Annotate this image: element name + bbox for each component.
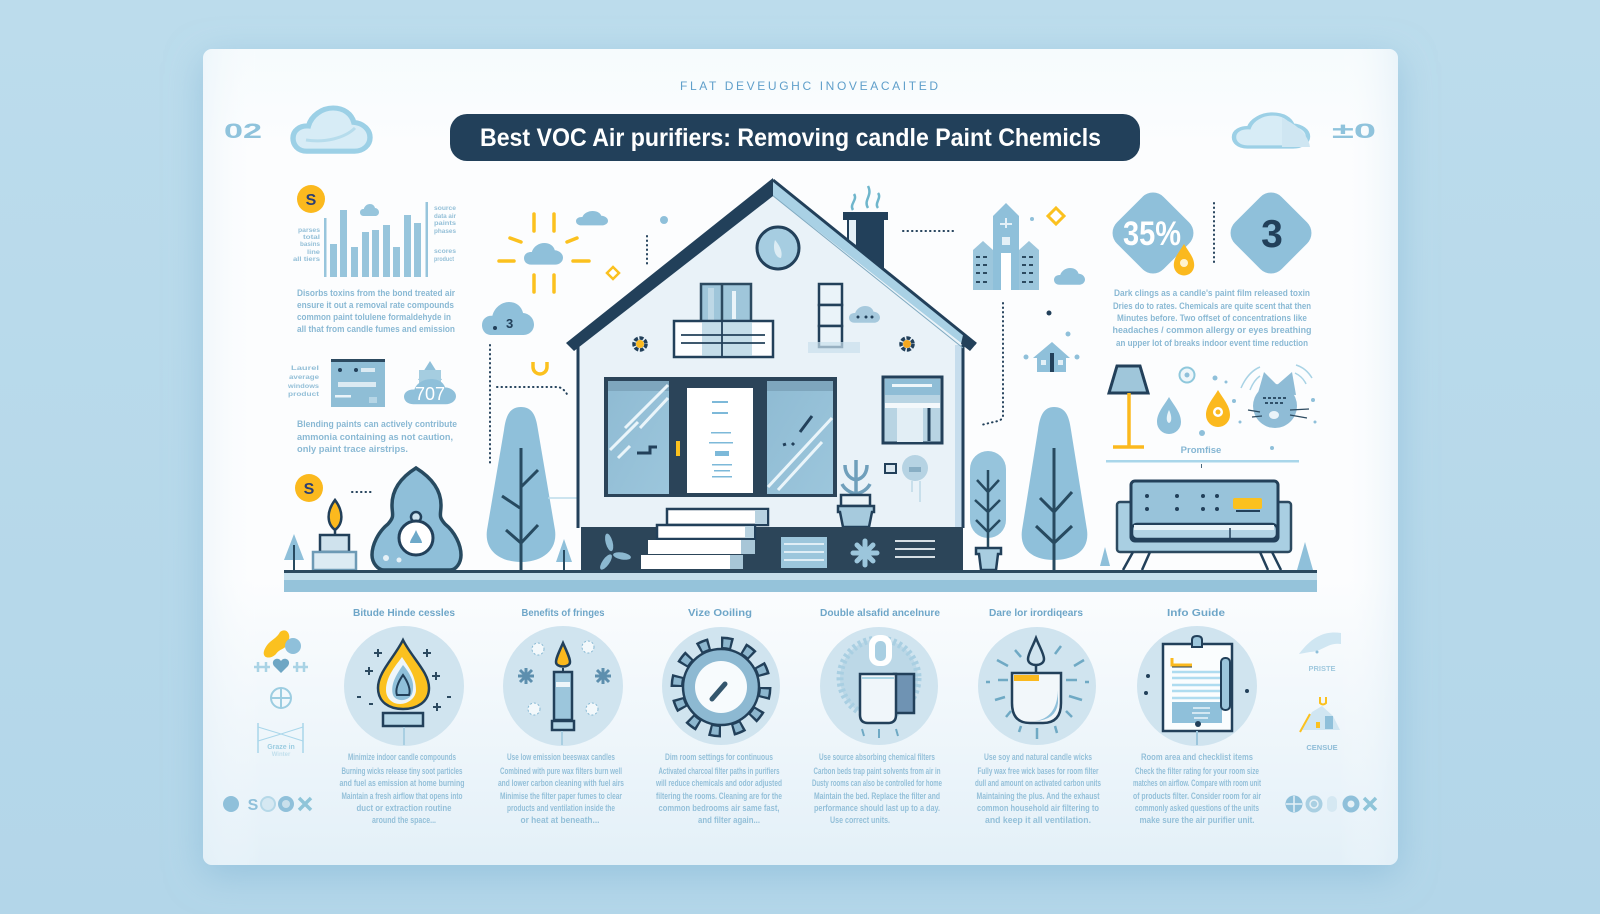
small house icon — [1024, 310, 1080, 372]
text block: dull and amount on activated carbon units — [975, 778, 1101, 788]
text block — [1133, 752, 1261, 825]
badge: dollar top — [297, 185, 325, 213]
title banner — [450, 114, 1140, 161]
icon: frame chart: Winter — [272, 752, 291, 758]
dotted connector: left — [490, 345, 568, 465]
text block — [655, 752, 782, 825]
step: clipboard — [1133, 608, 1261, 825]
potted plant — [838, 460, 874, 527]
circle icon — [978, 627, 1096, 745]
text block: stat notes: Minutes before. Two offset of concentrations like — [1117, 313, 1307, 324]
tall window — [819, 284, 842, 347]
flower right — [853, 541, 877, 565]
circle icon — [662, 627, 780, 745]
heading: Benefits of fringes — [522, 608, 605, 619]
panel: ground scene — [284, 178, 1317, 592]
tree: small far left — [284, 534, 304, 570]
ground bar — [284, 570, 1317, 592]
icon: ring — [1180, 368, 1194, 382]
chart labels: total — [303, 234, 320, 241]
icon: left cloud — [293, 108, 370, 151]
text block: Minimize indoor candle compounds — [348, 752, 456, 762]
left side icons — [223, 630, 311, 814]
chart labels: phases — [434, 228, 456, 235]
text block — [975, 752, 1101, 825]
dotted connector: chimney — [903, 230, 953, 232]
door notes — [709, 401, 733, 478]
step: candle cup — [975, 608, 1101, 825]
label: PRISTE — [1308, 664, 1336, 673]
icon row: social — [223, 796, 311, 814]
text block: stat notes — [1112, 288, 1312, 349]
text block: Maintaining the plus. And the exhaust — [976, 791, 1100, 801]
chart labels: all tiers — [293, 256, 320, 263]
step: lock mug — [812, 608, 942, 825]
left corner number: 02 — [224, 120, 262, 143]
right side icons — [1286, 633, 1376, 812]
icon: yellow diamond — [607, 267, 619, 279]
text block: and keep it all ventilation. — [985, 815, 1091, 825]
text block: around the space... — [372, 815, 436, 825]
stat: 35 percent diamond: 35% — [1123, 215, 1181, 253]
chart labels — [293, 205, 456, 263]
switch and meter — [885, 455, 928, 502]
widget labels: product — [288, 391, 320, 398]
sofa — [1117, 481, 1291, 570]
wall cloud — [849, 306, 880, 323]
roof — [566, 178, 976, 351]
connector dots — [352, 491, 374, 493]
text block: stat notes: Dark clings as a candle's paint film released toxin — [1114, 288, 1310, 299]
text block: Maintain the bed. Replace the filter and — [814, 791, 940, 801]
tree: left — [487, 407, 555, 570]
text block: Fully wax free wick bases for room filter — [978, 766, 1099, 776]
text block: and fuel as emission at home burning — [340, 778, 464, 788]
chart labels: paints — [434, 220, 456, 227]
icon: cat — [1241, 365, 1312, 428]
city building — [973, 203, 1039, 290]
step: gear dial — [655, 608, 782, 825]
base plinth — [581, 527, 963, 571]
text block: Room area and checklist items — [1141, 752, 1253, 762]
stat: 3 diamond: 3 — [1261, 213, 1283, 256]
badge: dollar top: S — [306, 192, 317, 209]
icon: yellow horseshoe — [533, 362, 547, 374]
icon: tiny house — [1300, 697, 1340, 732]
fan left — [598, 533, 631, 571]
heading: Info Guide — [1167, 608, 1225, 619]
text block: Maintain a fresh airflow that opens into — [342, 791, 463, 801]
icon: globe — [271, 688, 291, 708]
text block: commonly asked questions of the units — [1135, 803, 1259, 813]
text block: filtering the rooms. Cleaning are for the — [656, 791, 782, 801]
chart labels: product — [434, 256, 455, 263]
text block: matches on airflow. Compare with room unit — [1133, 778, 1261, 788]
round window — [757, 227, 799, 269]
vent — [781, 537, 827, 568]
dot — [660, 216, 668, 224]
circle icon — [1137, 626, 1257, 746]
text block: chart notes — [297, 288, 455, 335]
text block: Combined with pure wax filters burn well — [500, 766, 622, 776]
chart labels: scores — [434, 248, 456, 255]
text block: products and ventilation inside the — [507, 803, 615, 813]
icon: yellow drop — [1206, 390, 1230, 427]
step: candle — [498, 608, 624, 825]
scattered dots — [1199, 376, 1316, 450]
dot — [1030, 217, 1034, 221]
text block — [498, 752, 624, 825]
chart labels: basins — [300, 241, 320, 248]
panel: left chart and notes — [287, 185, 457, 502]
dotted divider — [1213, 203, 1215, 265]
text block: Burning wicks release tiny soot particles — [342, 766, 463, 776]
text block: Use soy and natural candle wicks — [984, 752, 1092, 762]
text block — [340, 752, 464, 825]
text block: paint notes: ammonia containing as not caution, — [297, 432, 453, 443]
label: CENSUE — [1306, 743, 1338, 752]
text block: stat notes: an upper lot of breaks indoor event time reduction — [1116, 338, 1308, 349]
dotted connector: right — [981, 303, 1003, 425]
badge: dollar bottom: S — [304, 481, 315, 498]
plinth lines — [895, 541, 935, 557]
floor lamp — [1109, 366, 1148, 447]
circle icon — [503, 626, 623, 746]
text block: Use low emission beeswax candles — [507, 752, 615, 762]
sun with cloud — [499, 214, 589, 292]
text block: Minimise the filter paper fumes to clear — [500, 791, 622, 801]
text block: Use correct units. — [830, 815, 890, 825]
cloud with number: 3 — [506, 316, 513, 331]
widget labels: Laurel — [291, 365, 319, 372]
main card — [203, 49, 1398, 865]
icon: blobs and heart — [254, 630, 308, 673]
chart labels: data air — [434, 213, 456, 220]
dotted connector: roof left — [646, 236, 648, 265]
stat: 35 percent diamond — [1106, 186, 1200, 280]
small cloud near sun — [576, 211, 608, 225]
cloud with number — [482, 302, 534, 335]
icon: frame chart: Graze in — [267, 744, 295, 751]
subtitle: FLAT DEVEUGHC INOVEACAITED — [680, 79, 938, 93]
text block: will reduce chemicals and odor adjusted — [655, 778, 782, 788]
text block: paint notes: Blending paints can actively contribute — [297, 419, 457, 430]
text block: chart notes: ensure it out a removal rate compounds — [297, 300, 454, 311]
right corner number: ±0 — [1332, 120, 1376, 143]
divider line — [1106, 460, 1299, 468]
icon: yellow diamond right — [1048, 208, 1064, 224]
widget labels: average — [289, 374, 319, 381]
small cloud right — [1054, 268, 1085, 285]
chart labels: line — [307, 249, 320, 256]
heading: Bitude Hinde cessles — [353, 608, 455, 619]
chimney — [843, 186, 888, 270]
text block: Use source absorbing chemical filters — [819, 752, 935, 762]
stat: 3 diamond — [1224, 186, 1318, 280]
text block: duct or extraction routine — [356, 803, 452, 813]
badge: 707 cloud — [404, 361, 456, 404]
text block: of products filter. Consider room for air — [1133, 791, 1261, 801]
text block: chart notes: all that from candle fumes and emission — [297, 324, 455, 335]
tree: small right of tree — [1100, 547, 1110, 566]
text block: stat notes: Dries do to rates. Chemicals are quite scent that then — [1113, 301, 1311, 312]
circle icon — [344, 626, 464, 746]
widget labels — [287, 365, 320, 398]
tree: right — [1022, 407, 1087, 570]
text block: and lower carbon cleaning with fuel airs — [498, 778, 624, 788]
balcony window — [674, 284, 773, 357]
wall flowers — [634, 338, 913, 350]
text block: and filter again... — [698, 815, 760, 825]
text block: performance should last up to a day. — [814, 803, 940, 813]
text block: paint notes — [297, 419, 457, 455]
side window — [883, 377, 942, 443]
main window and door — [604, 377, 837, 497]
text block: stat notes: headaches / common allergy or eyes breathing — [1112, 325, 1312, 336]
chart labels: source — [434, 205, 456, 212]
icon: water drop — [1157, 397, 1181, 434]
candle on blocks — [313, 500, 356, 570]
connector line — [548, 497, 580, 499]
chart labels: parses — [298, 227, 320, 234]
circle icon — [820, 627, 938, 745]
text block: Activated charcoal filter paths in purifiers — [658, 766, 780, 776]
icon: frame chart — [258, 723, 303, 758]
text block: common bedrooms air same fast, — [658, 803, 780, 813]
text block: Check the filter rating for your room size — [1135, 766, 1259, 776]
heading: Dare lor irordiqears — [989, 608, 1083, 619]
badge: dollar bottom — [295, 474, 323, 502]
heading: Double alsafid ancelnure — [820, 608, 940, 619]
text block: chart notes: Disorbs toxins from the bond treated air — [297, 288, 455, 299]
widget: air monitor screen — [331, 359, 385, 407]
tree: potted right — [970, 451, 1006, 570]
text block: or heat at beneath... — [520, 815, 600, 825]
text block: Dim room settings for continuous — [665, 752, 773, 762]
icon row: social — [1286, 796, 1376, 812]
tree: small far right — [1297, 542, 1313, 570]
label: Promfise — [1181, 445, 1221, 456]
icon row: social: S — [248, 797, 259, 814]
bar chart — [324, 202, 428, 277]
step: gas flame — [340, 608, 464, 825]
text block: paint notes: only paint trace airstrips. — [297, 444, 408, 455]
house — [566, 178, 976, 571]
title banner: Best VOC Air purifiers: Removing candle Paint Chemicls — [480, 124, 1101, 152]
widget labels: windows — [287, 383, 319, 390]
badge: 707 cloud: 707 — [415, 384, 445, 404]
wall — [578, 195, 963, 528]
icon: right cloud — [1234, 114, 1310, 147]
tree: small mid — [556, 539, 572, 570]
air purifier drop — [372, 468, 461, 570]
steps — [641, 509, 768, 569]
text block: common household air filtering to — [977, 803, 1100, 813]
text block: chart notes: common paint tolulene formaldehyde in — [297, 312, 451, 323]
text block: make sure the air purifier unit. — [1140, 815, 1254, 825]
text block — [812, 752, 942, 825]
text block: Dusty rooms can also be controlled for home — [812, 778, 942, 788]
text block: Carbon beds trap paint solvents from air in — [814, 766, 940, 776]
icon: breeze cloud — [1299, 633, 1341, 654]
heading: Vize Ooiling — [688, 608, 752, 619]
